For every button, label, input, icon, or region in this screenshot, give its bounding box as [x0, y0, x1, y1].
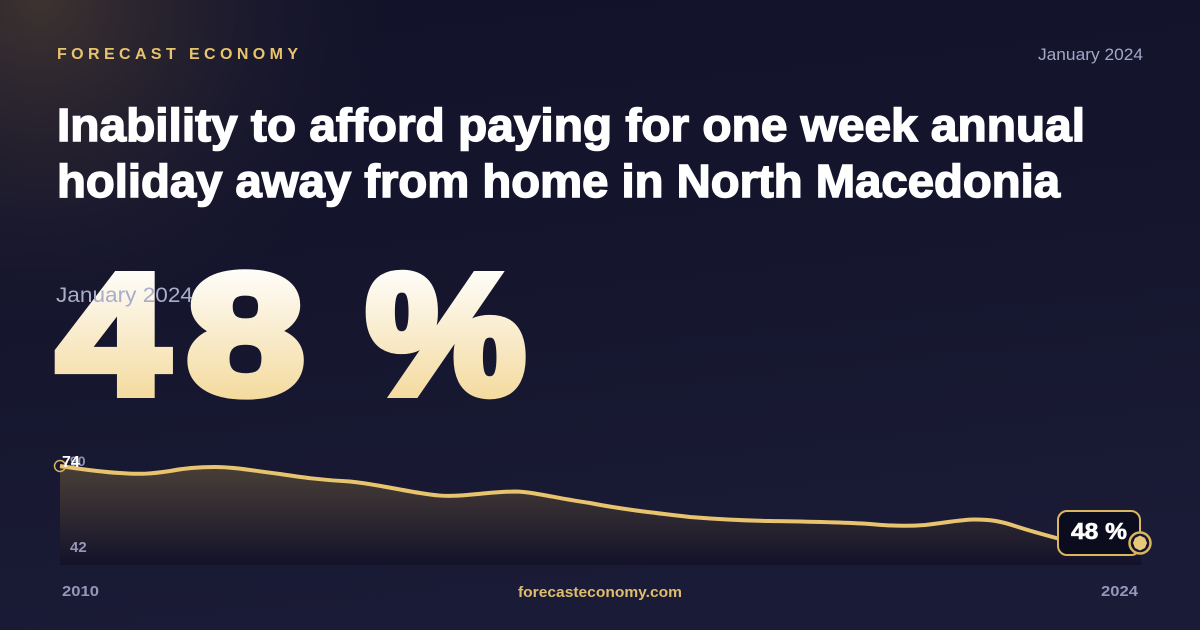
area chart	[54, 453, 1150, 565]
y axis min label: 42	[70, 539, 87, 556]
big value: %	[366, 239, 525, 429]
end marker	[1130, 532, 1150, 554]
date top right: January 2024	[1038, 46, 1143, 64]
start marker	[54, 460, 66, 472]
big value: 4	[58, 240, 168, 430]
start value: 74	[62, 454, 80, 471]
big value	[58, 239, 525, 430]
overlapping date label: January 2024	[56, 284, 193, 307]
source website: forecasteconomy.com	[518, 584, 682, 601]
end year: 2024	[1101, 583, 1139, 600]
chart line	[60, 466, 1140, 543]
chart area fill	[60, 466, 1141, 565]
y axis max label: 90	[70, 453, 86, 469]
end value callout: 48 %	[1071, 518, 1127, 544]
title: Inability to afford paying for one week annual	[57, 99, 1085, 151]
brand label: FORECAST ECONOMY	[57, 46, 298, 63]
end value callout	[1058, 511, 1140, 555]
start year: 2010	[62, 583, 99, 600]
title	[57, 99, 1085, 207]
big value: 8	[187, 239, 304, 429]
title: holiday away from home in North Macedonia	[57, 155, 1060, 207]
